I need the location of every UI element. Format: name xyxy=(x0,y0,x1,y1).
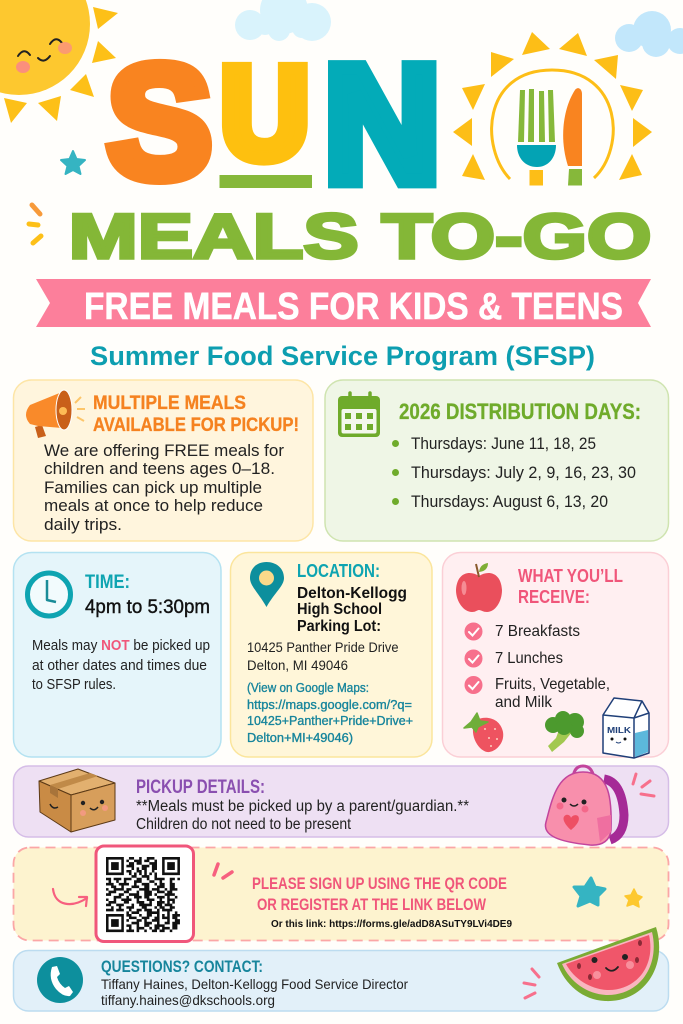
panel: time xyxy=(14,552,221,757)
heading xyxy=(93,393,299,436)
icon: yellow star xyxy=(625,889,642,907)
icon: broccoli xyxy=(545,711,584,752)
icon: clock xyxy=(28,573,70,616)
venue name xyxy=(297,585,407,635)
text block: Families can pick up multiple xyxy=(44,479,262,497)
text block: at other dates and times due xyxy=(32,658,207,674)
icon: sparks xyxy=(214,864,232,878)
text block: We are offering FREE meals for xyxy=(44,442,285,460)
QR code xyxy=(96,846,194,942)
map link: 10425+Panther+Pride+Drive+ xyxy=(247,713,413,728)
map link xyxy=(247,680,413,745)
address xyxy=(247,639,399,673)
icon: teal star xyxy=(574,878,605,906)
title: SUN: S xyxy=(107,33,212,211)
text block xyxy=(32,638,210,693)
list: dates: Thursdays: August 6, 13, 20 xyxy=(411,492,608,511)
heading: meals to-go: MEALS TO-GO xyxy=(69,202,651,272)
venue name: Parking Lot: xyxy=(297,618,381,635)
icon: strawberry xyxy=(464,713,503,752)
text block xyxy=(44,442,285,534)
list: items xyxy=(464,622,610,711)
venue name: Delton-Kellogg xyxy=(297,585,407,602)
address: 10425 Panther Pride Drive xyxy=(247,639,399,655)
icon: arrow xyxy=(53,889,87,906)
icon: milk carton: MILK xyxy=(607,725,632,735)
icon: backpack xyxy=(545,766,624,845)
panel: pickup details xyxy=(14,766,668,837)
icon: watermelon xyxy=(557,927,659,1001)
time value: 4pm to 5:30pm xyxy=(85,597,210,618)
icon: sparks xyxy=(29,205,41,243)
title: SUN: N xyxy=(324,33,440,217)
panel: what you'll receive xyxy=(442,552,668,758)
icon: sparks near backpack xyxy=(633,774,654,796)
icon: sparks near watermelon xyxy=(524,969,539,998)
icon: map pin xyxy=(250,562,284,607)
list: items: 7 Lunches xyxy=(495,650,563,667)
icon: teal star xyxy=(61,151,85,174)
map link: https://maps.google.com/?q= xyxy=(247,697,412,712)
heading: LOCATION: xyxy=(297,560,380,581)
list: dates: Thursdays: July 2, 9, 16, 23, 30 xyxy=(411,463,636,482)
address: Delton, MI 49046 xyxy=(247,657,348,673)
heading: AVAILABLE FOR PICKUP! xyxy=(93,415,299,436)
contact details: tiffany.haines@dkschools.org xyxy=(101,992,275,1008)
panel: contact xyxy=(14,950,668,1011)
icon: milk carton xyxy=(603,698,649,758)
text block xyxy=(136,798,469,833)
list: items: and Milk xyxy=(495,694,553,711)
icon: calendar xyxy=(338,393,380,437)
heading: QUESTIONS? CONTACT: xyxy=(101,958,263,976)
icon: megaphone xyxy=(26,390,85,438)
title: SUN: U xyxy=(221,40,309,186)
panel: location xyxy=(230,552,432,757)
list: dates: Thursdays: June 11, 18, 25 xyxy=(411,434,596,453)
heading xyxy=(518,565,623,607)
icon: apple xyxy=(456,563,502,612)
heading: 2026 DISTRIBUTION DAYS: xyxy=(399,399,641,424)
panel: multiple meals xyxy=(14,380,313,541)
contact details xyxy=(101,976,408,1008)
call to action: PLEASE SIGN UP USING THE QR CODE xyxy=(252,874,507,893)
banner: free meals: FREE MEALS FOR KIDS & TEENS xyxy=(84,286,623,328)
heading: TIME: xyxy=(85,572,130,593)
heading: MULTIPLE MEALS xyxy=(93,393,246,414)
list: items: 7 Breakfasts xyxy=(495,623,580,640)
icon: cloud right xyxy=(615,11,683,57)
text block: Meals may NOT be picked up xyxy=(32,638,210,654)
call to action xyxy=(252,874,507,914)
icon: smiling sun xyxy=(0,0,118,123)
text block: **Meals must be picked up by a parent/guardian.** xyxy=(136,798,469,815)
contact details: Tiffany Haines, Delton-Kellogg Food Service Director xyxy=(101,976,408,992)
list: dates xyxy=(392,434,636,511)
subtitle: Summer Food Service Program (SFSP) xyxy=(90,341,595,371)
heading: WHAT YOU’LL xyxy=(518,565,623,586)
icon: phone xyxy=(37,957,83,1003)
panel: sign up xyxy=(14,846,668,942)
panel: distribution days xyxy=(325,380,668,541)
text block: to SFSP rules. xyxy=(32,677,116,693)
title: SUN xyxy=(107,33,440,217)
heading: PICKUP DETAILS: xyxy=(136,777,265,798)
icon: box xyxy=(39,769,115,832)
icon: sun with fork and knife xyxy=(453,32,652,186)
call to action: OR REGISTER AT THE LINK BELOW xyxy=(257,895,487,914)
signup link: Or this link: https://forms.gle/adD8ASuTY9LVi4DE9 xyxy=(271,918,512,930)
text block: daily trips. xyxy=(44,516,122,534)
icon: cloud centre xyxy=(235,0,331,41)
map link: Delton+MI+49046) xyxy=(247,730,353,745)
text block: meals at once to help reduce xyxy=(44,497,263,515)
heading: RECEIVE: xyxy=(518,586,590,607)
venue name: High School xyxy=(297,601,382,618)
text block: Children do not need to be present xyxy=(136,816,352,833)
map link: (View on Google Maps: xyxy=(247,680,369,695)
list: items: Fruits, Vegetable, xyxy=(495,676,610,693)
text block: children and teens ages 0–18. xyxy=(44,460,275,478)
